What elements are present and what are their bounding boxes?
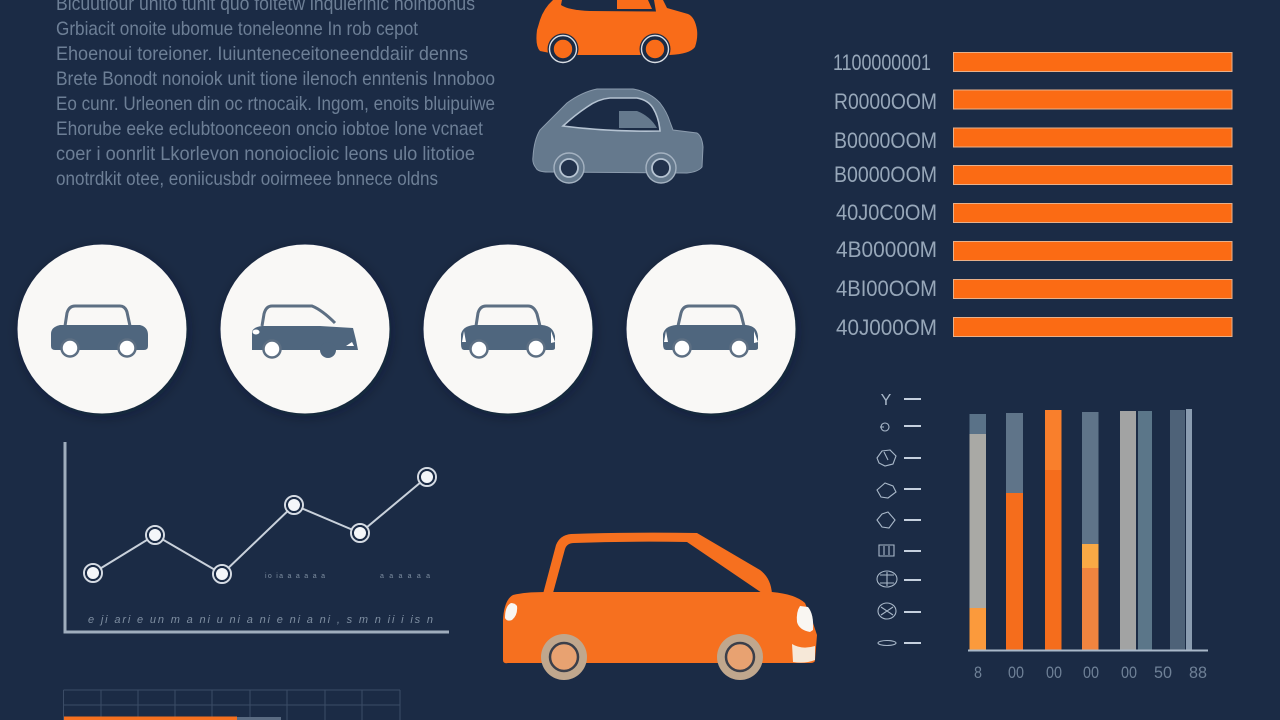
x-axis labels	[974, 663, 1207, 682]
x-axis labels: 00	[1046, 663, 1062, 682]
column 1	[970, 414, 986, 650]
column 2	[1006, 413, 1023, 650]
badge: car 2	[220, 244, 390, 414]
bar labels: 4BI00OOM	[836, 276, 937, 301]
x-axis labels: 00	[1008, 663, 1024, 682]
x-axis labels: 8	[974, 663, 982, 682]
bottom table bar	[64, 690, 400, 720]
bar labels	[833, 50, 937, 340]
small chart notes	[265, 573, 430, 580]
bars	[954, 52, 1232, 336]
badge: car 1	[18, 244, 186, 414]
data line	[93, 477, 427, 574]
data points	[84, 468, 436, 583]
legend icons and ticks	[877, 392, 921, 646]
text block: body paragraph	[56, 0, 495, 190]
column 6	[1138, 411, 1152, 650]
line chart	[65, 442, 449, 632]
column 5	[1120, 411, 1136, 650]
x-axis labels: 00	[1083, 663, 1099, 682]
bar labels: 40J0C0OM	[836, 200, 937, 225]
baseline	[968, 650, 1208, 652]
x-axis labels: 00	[1121, 663, 1137, 682]
text block: body paragraph: Grbiacit onoite ubomue toneleonne In rob cepot	[56, 18, 419, 40]
chart caption: e ji ari e un m a ni u ni a ni e ni a ni , s m n ii i is n	[88, 614, 433, 626]
bar labels: 4B00000M	[836, 237, 937, 262]
column 4	[1082, 412, 1098, 650]
icon: large orange car	[503, 533, 817, 680]
text block: body paragraph: coer i oonrlit Lkorlevon nonoioclioic leons ulo litotioe	[56, 143, 475, 165]
legend icons and ticks: Y	[881, 392, 892, 409]
bar labels: R0000OOM	[834, 89, 937, 114]
chart axes	[65, 442, 449, 632]
bar labels: 1100000001	[833, 50, 931, 75]
text block: body paragraph: Eo cunr. Urleonen din oc rtnocaik. Ingom, enoits bluipuiwe	[56, 93, 495, 115]
small chart notes: io ia a a a a a	[265, 573, 325, 580]
text block: body paragraph: Ehoenoui toreioner. Iuiunteneceitoneenddaiir denns	[56, 43, 468, 65]
icon: orange car top	[536, 0, 697, 64]
badge: car 3	[424, 244, 592, 414]
small chart notes: a a a a a a	[380, 573, 430, 580]
x-axis labels: 88	[1189, 663, 1207, 682]
horizontal bar chart	[833, 50, 1232, 340]
bar labels: B0000OOM	[834, 162, 937, 187]
icon: grey car	[533, 89, 703, 183]
column 7	[1170, 409, 1192, 650]
text block: body paragraph: Ehorube eeke eclubtoonceeon oncio iobtoe lone vcnaet	[56, 118, 484, 140]
x-axis labels: 50	[1154, 663, 1172, 682]
rear wheel	[717, 634, 763, 680]
bar labels: B0000OOM	[834, 128, 937, 153]
badge: car 4	[626, 244, 796, 414]
text block: body paragraph: onotrdkit otee, eoniicusbdr ooirmeee bnnece oldns	[56, 168, 438, 190]
column 3	[1045, 410, 1062, 650]
icon row: four car badges	[18, 244, 796, 414]
text block: body paragraph: Brete Bonodt nonoiok unit tione ilenoch enntenis Innoboo	[56, 68, 495, 90]
bar labels: 40J000OM	[836, 315, 937, 340]
front wheel	[541, 634, 587, 680]
stacked bar chart	[877, 392, 1208, 682]
